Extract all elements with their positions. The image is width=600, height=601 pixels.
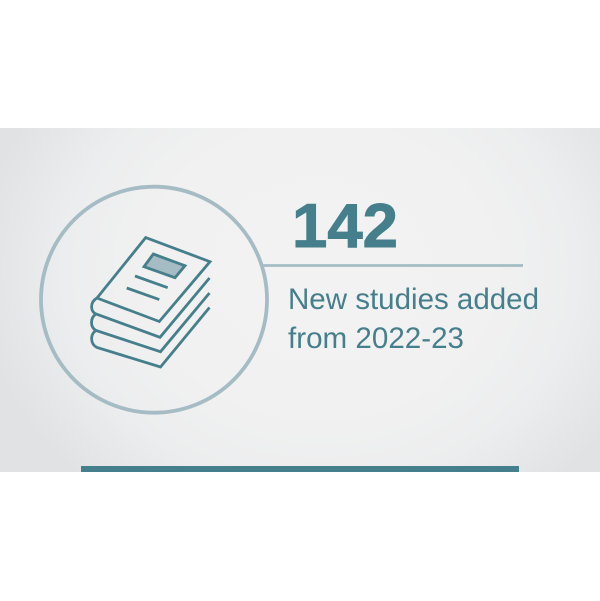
- third book: [92, 293, 210, 352]
- second book: [92, 278, 210, 337]
- bottom accent bar: [81, 466, 519, 472]
- connector line: [262, 264, 523, 267]
- cover label: [144, 254, 185, 278]
- panel: background: [0, 128, 600, 472]
- big number: 142: [292, 192, 398, 261]
- caption line 1: New studies added: [288, 283, 539, 316]
- cover text lines: [127, 276, 168, 300]
- icon: stack of books: [92, 238, 210, 367]
- caption line 2: from 2022-23: [288, 322, 464, 355]
- fourth book: [92, 308, 210, 367]
- book cover: [97, 238, 210, 322]
- icon circle: [41, 187, 267, 413]
- caption: [288, 283, 539, 355]
